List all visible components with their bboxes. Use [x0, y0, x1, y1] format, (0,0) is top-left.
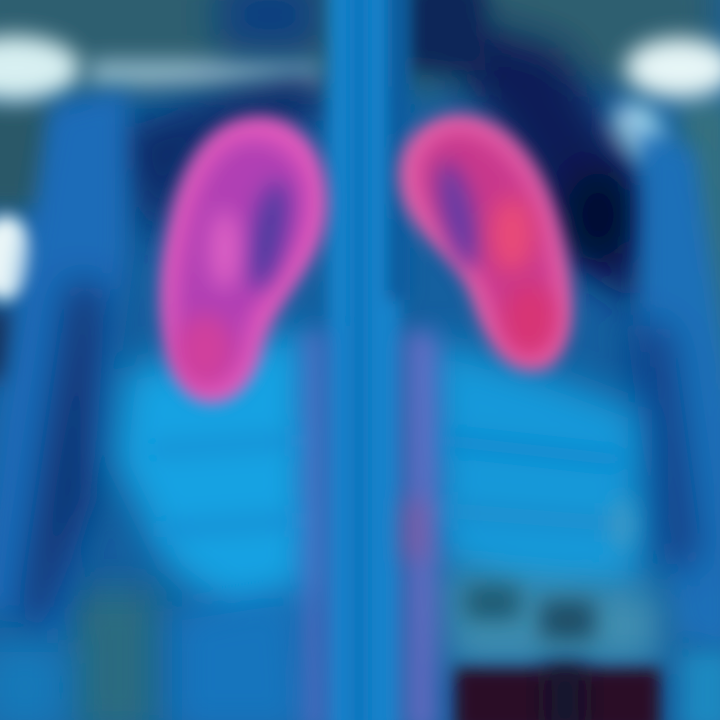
torso: dark chest regions: [120, 0, 650, 310]
spine: central column: [328, 0, 410, 720]
kidney: left: [160, 117, 327, 402]
lower torso: cyan abdominal area: [115, 330, 660, 720]
kidney: right: [399, 114, 572, 370]
ceiling and wall lights: [0, 36, 720, 300]
dark base area bottom right: [455, 665, 660, 720]
ureters: purple vessels: [302, 330, 438, 720]
